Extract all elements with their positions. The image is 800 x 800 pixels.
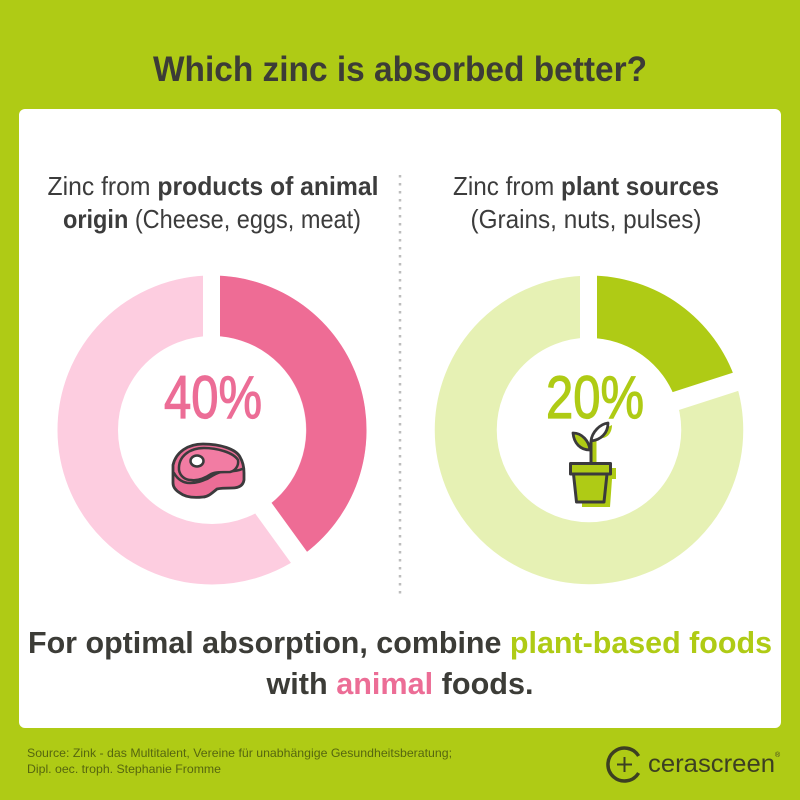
heading: plant sources: Zinc from plant sources xyxy=(453,171,719,201)
donut label: 40%: 40% xyxy=(164,364,262,431)
title: Which zinc is absorbed better? xyxy=(153,50,647,89)
source note: Source: Zink - das Multitalent, Vereine für unabhängige Gesundheitsberatung; xyxy=(27,746,452,760)
heading: animal origin xyxy=(48,171,379,234)
conclusion text: with animal foods. xyxy=(266,666,534,701)
logo: cerascreen xyxy=(608,748,781,781)
heading: plant sources xyxy=(453,171,719,234)
conclusion text: For optimal absorption, combine plant-based foods xyxy=(28,625,772,660)
logo: cerascreen: cerascreen xyxy=(648,750,775,778)
source note xyxy=(27,746,452,776)
donut chart: plant 20% xyxy=(466,265,752,553)
heading: animal origin: origin (Cheese, eggs, meat) xyxy=(63,204,361,234)
logo: cerascreen: ® xyxy=(775,751,781,759)
divider xyxy=(399,175,401,597)
donut chart: animal 40% xyxy=(88,265,367,567)
icon: plant in pot xyxy=(570,423,616,507)
source note: Dipl. oec. troph. Stephanie Fromme xyxy=(27,762,221,776)
donut label: 20%: 20% xyxy=(546,364,644,431)
heading: plant sources: (Grains, nuts, pulses) xyxy=(470,204,702,234)
icon: meat steak xyxy=(173,444,244,497)
heading: animal origin: Zinc from products of animal xyxy=(48,171,379,201)
conclusion text xyxy=(28,625,772,701)
panel: white card xyxy=(19,109,781,728)
